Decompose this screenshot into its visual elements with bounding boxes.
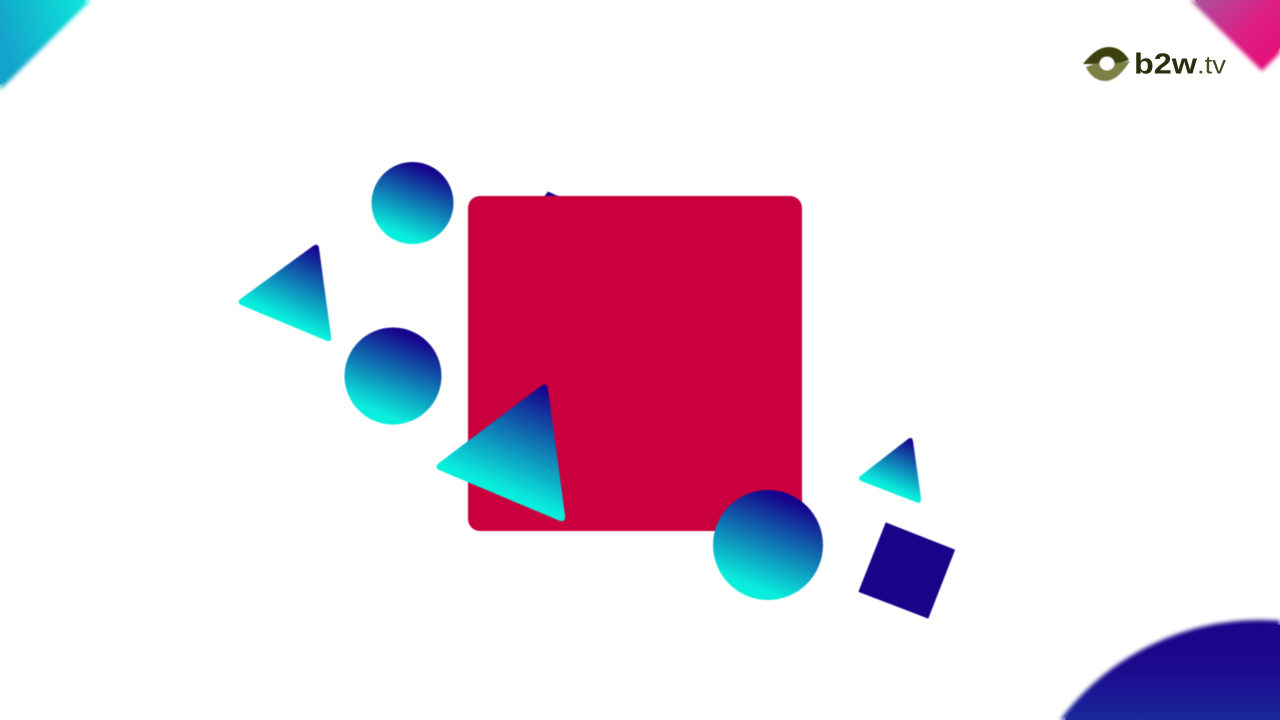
triangle: small right <box>859 438 921 503</box>
corner shape: top-left cyan <box>0 0 91 90</box>
circle: middle <box>344 328 442 424</box>
triangle: left <box>238 245 331 341</box>
red rounded square <box>468 196 802 531</box>
logo: b2w.tv <box>1083 47 1227 81</box>
navy rotated square <box>859 523 954 618</box>
small navy triangle tip behind square <box>544 192 560 197</box>
logo wordmark: b2w <box>1134 48 1197 80</box>
logo icon: eye <box>1083 47 1130 81</box>
corner shape: bottom-right navy circle <box>1060 620 1280 720</box>
corner shape: top-right pink <box>1190 0 1280 71</box>
logo suffix: .tv <box>1197 52 1227 80</box>
circle: large lower right <box>713 490 823 600</box>
triangle: large centre <box>436 385 565 521</box>
circle: top <box>372 162 454 244</box>
red square panel <box>468 192 802 531</box>
